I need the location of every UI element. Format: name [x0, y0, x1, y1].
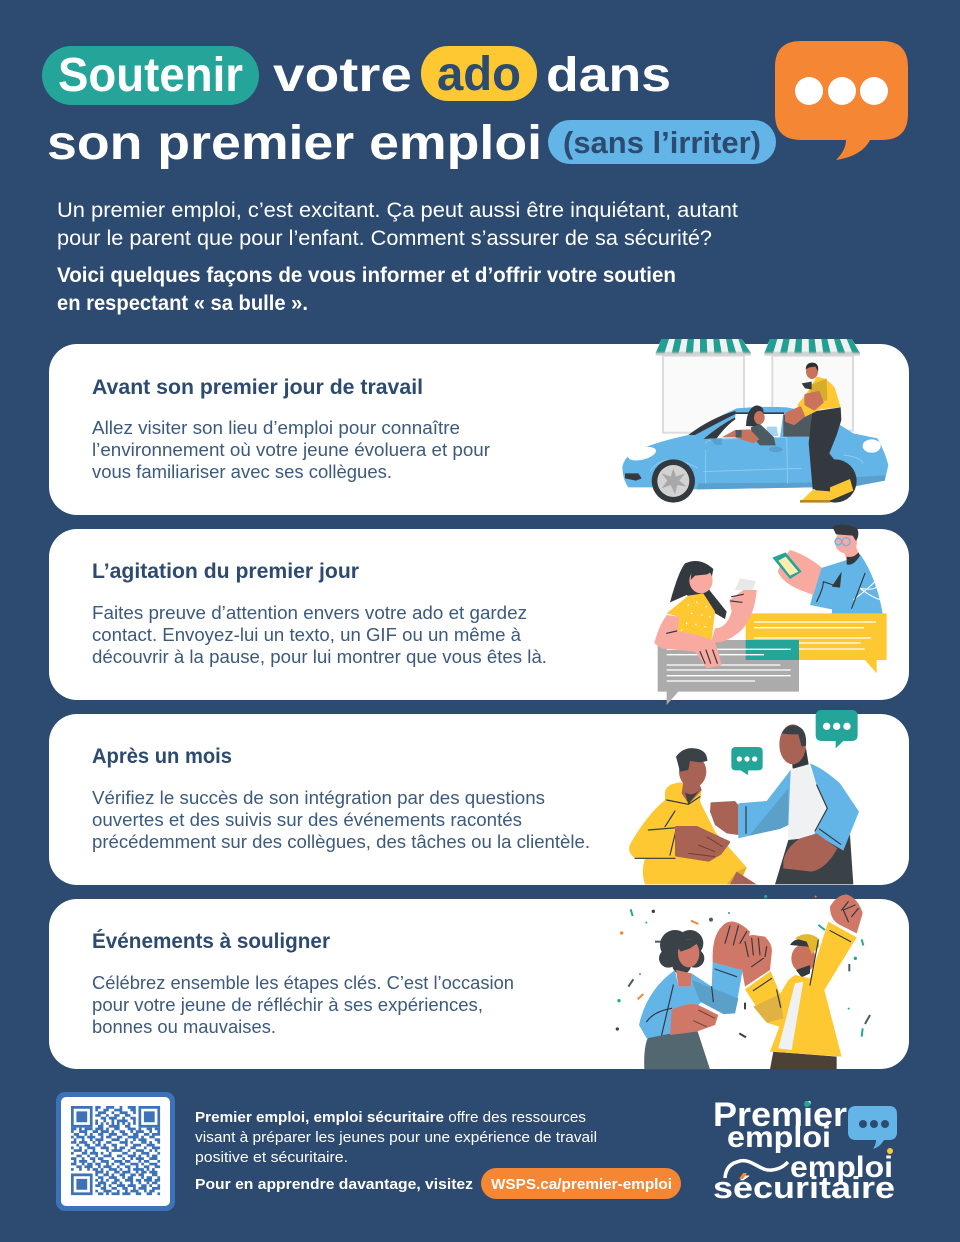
title: son premier emploi [47, 117, 542, 170]
text: apres un mois [92, 787, 590, 852]
footer text: positive et sécuritaire. [195, 1149, 348, 1166]
older man [792, 748, 809, 769]
title: votre [273, 49, 412, 102]
footer text [195, 1109, 597, 1193]
illustration: car and storefront [622, 339, 888, 503]
text: l'agitation: Faites preuve d’attention envers votre ado et gardez [92, 602, 527, 623]
intro text: Un premier emploi, c’est excitant. Ça peut aussi être inquiétant, autant [57, 198, 738, 222]
confetti [616, 895, 870, 1037]
text: apres un mois: précédemment sur des collègues, des tâches ou la clientèle. [92, 831, 590, 852]
intro text: Voici quelques façons de vous informer et d’offrir votre soutien [57, 263, 676, 287]
panel: evenements a souligner [49, 894, 909, 1069]
yellow bubble [746, 613, 887, 673]
driver [746, 405, 764, 427]
intro text [57, 198, 738, 315]
panel: apres un mois [49, 710, 909, 885]
text: evenements: Célébrez ensemble les étapes clés. C’est l’occasion [92, 972, 514, 993]
illustration: two people talking [629, 710, 859, 884]
icon: orange speech bubble [775, 41, 908, 160]
footer text: Pour en apprendre davantage, visitez [195, 1176, 473, 1193]
man in blue [810, 555, 883, 614]
speech bubbles [816, 710, 858, 748]
illustration: high five [616, 894, 870, 1069]
link pill [481, 1168, 681, 1199]
young man in hoodie [629, 782, 747, 884]
title: (sans l’irriter) [563, 125, 761, 160]
illustration: texting [654, 525, 887, 705]
woman [670, 561, 727, 619]
logo: emploi [790, 1151, 893, 1184]
logo [713, 1096, 897, 1205]
heading: avant son premier jour: Avant son premier jour de travail [92, 376, 423, 399]
logo: emploi [727, 1121, 831, 1154]
title: Soutenir [58, 49, 243, 102]
car [622, 407, 888, 489]
intro text: pour le parent que pour l’enfant. Comment s’assurer de sa sécurité? [57, 226, 712, 250]
title: dans [546, 49, 671, 102]
text: evenements: bonnes ou mauvaises. [92, 1016, 276, 1037]
panel: avant son premier jour [49, 339, 909, 515]
text: avant son premier jour: l’environnement où votre jeune évoluera et pour [92, 439, 490, 460]
man [783, 412, 812, 437]
title: ado [437, 48, 521, 101]
logo: Premier [713, 1096, 847, 1134]
link pill: WSPS.ca/premier-emploi [491, 1176, 672, 1193]
text: evenements: pour votre jeune de réfléchir à ses expériences, [92, 994, 483, 1015]
heading: apres un mois: Après un mois [92, 745, 232, 768]
text: l'agitation [92, 602, 547, 667]
text: l'agitation: découvrir à la pause, pour lui montrer que vous êtes là. [92, 646, 547, 667]
text: avant son premier jour: Allez visiter son lieu d’emploi pour connaître [92, 417, 460, 438]
grey bubble [658, 640, 799, 705]
heading: evenements: Événements à souligner [92, 930, 330, 953]
panel: l'agitation du premier jour [49, 525, 909, 705]
text: avant son premier jour: vous familiariser avec ses collègues. [92, 461, 392, 482]
heading: l'agitation: L’agitation du premier jour [92, 560, 359, 583]
text: avant son premier jour [92, 417, 490, 482]
footer text: visant à préparer les jeunes pour une expérience de travail [195, 1129, 597, 1146]
man [770, 1052, 837, 1069]
woman [644, 1028, 710, 1069]
QR code [56, 1092, 175, 1211]
title [42, 46, 776, 170]
intro text: en respectant « sa bulle ». [57, 291, 308, 315]
text: apres un mois: ouvertes et des suivis sur des événements racontés [92, 809, 522, 830]
footer text: Premier emploi, emploi sécuritaire offre des ressources [195, 1109, 586, 1126]
text: l'agitation: contact. Envoyez-lui un texto, un GIF ou un même à [92, 624, 522, 645]
logo: sécuritaire [713, 1170, 895, 1205]
text: evenements [92, 972, 514, 1037]
text: apres un mois: Vérifiez le succès de son intégration par des questions [92, 787, 545, 808]
